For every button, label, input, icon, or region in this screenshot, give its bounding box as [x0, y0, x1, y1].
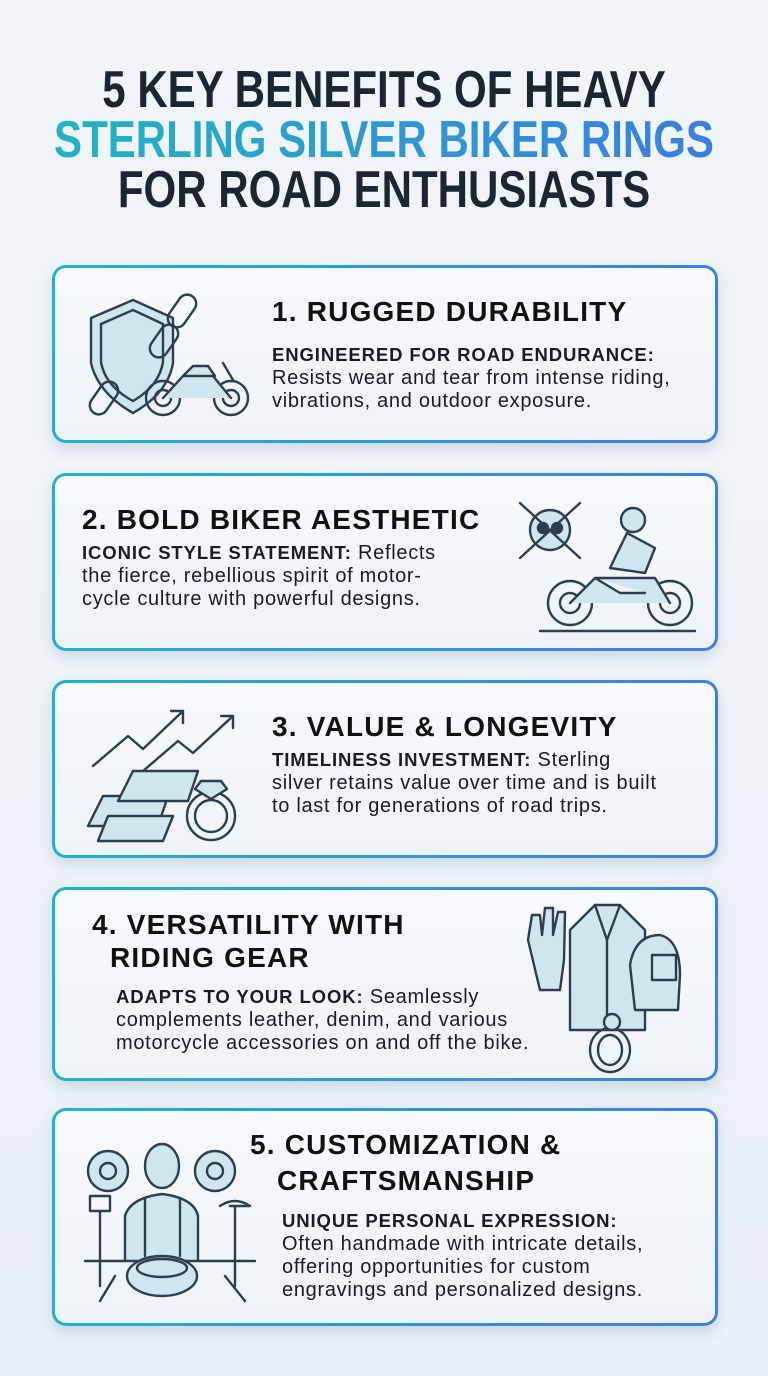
text: ICONIC STYLE STATEMENT: Reflects — [82, 542, 436, 564]
text: ADAPTS TO YOUR LOOK: Seamlessly — [116, 986, 479, 1008]
text: motorcycle accessories on and off the bike. — [116, 1032, 529, 1054]
panel: customization and craftsmanship — [52, 1108, 718, 1326]
text: ENGINEERED FOR ROAD ENDURANCE: — [272, 344, 655, 365]
heading: RIDING GEAR — [110, 942, 310, 973]
icon: gloves jacket helmet ring — [526, 904, 682, 1074]
title: 5 KEY BENEFITS OF HEAVY — [102, 61, 666, 119]
text: engravings and personalized designs. — [282, 1279, 643, 1301]
text: Resists wear and tear from intense riding, — [272, 367, 670, 389]
icon: silver bars, arrows, ring — [86, 710, 236, 842]
heading: CRAFTSMANSHIP — [277, 1165, 535, 1196]
text — [272, 344, 670, 412]
text — [282, 1210, 643, 1301]
heading: 2. BOLD BIKER AESTHETIC — [82, 504, 480, 535]
text: offering opportunities for custom — [282, 1256, 590, 1278]
text: UNIQUE PERSONAL EXPRESSION: — [282, 1210, 617, 1231]
icon: shield chain motorcycle — [88, 293, 250, 416]
text — [116, 986, 529, 1054]
text: to last for generations of road trips. — [272, 795, 608, 817]
heading — [92, 909, 405, 973]
title: FOR ROAD ENTHUSIASTS — [118, 161, 650, 219]
text: TIMELINESS INVESTMENT: Sterling — [272, 749, 611, 771]
panel: versatility with riding gear — [52, 887, 718, 1081]
text — [272, 749, 657, 817]
text: vibrations, and outdoor exposure. — [272, 390, 592, 412]
title — [54, 61, 714, 219]
panel: rugged durability — [52, 265, 718, 443]
text: cycle culture with powerful designs. — [82, 588, 421, 610]
panel: bold biker aesthetic — [52, 473, 718, 651]
heading: 1. RUGGED DURABILITY — [272, 296, 627, 327]
text: Often handmade with intricate details, — [282, 1233, 643, 1255]
title: STERLING SILVER BIKER RINGS — [54, 111, 714, 169]
heading: 4. VERSATILITY WITH — [92, 909, 405, 940]
heading: 5. CUSTOMIZATION & — [250, 1129, 561, 1160]
text: complements leather, denim, and various — [116, 1009, 508, 1031]
panel: value and longevity — [52, 680, 718, 858]
heading — [250, 1129, 561, 1196]
heading: 3. VALUE & LONGEVITY — [272, 711, 618, 742]
icon: craftsman — [84, 1142, 256, 1302]
icon: skull and rider — [518, 502, 696, 632]
text: silver retains value over time and is built — [272, 772, 657, 794]
text: the fierce, rebellious spirit of motor- — [82, 565, 422, 587]
text — [82, 542, 436, 610]
